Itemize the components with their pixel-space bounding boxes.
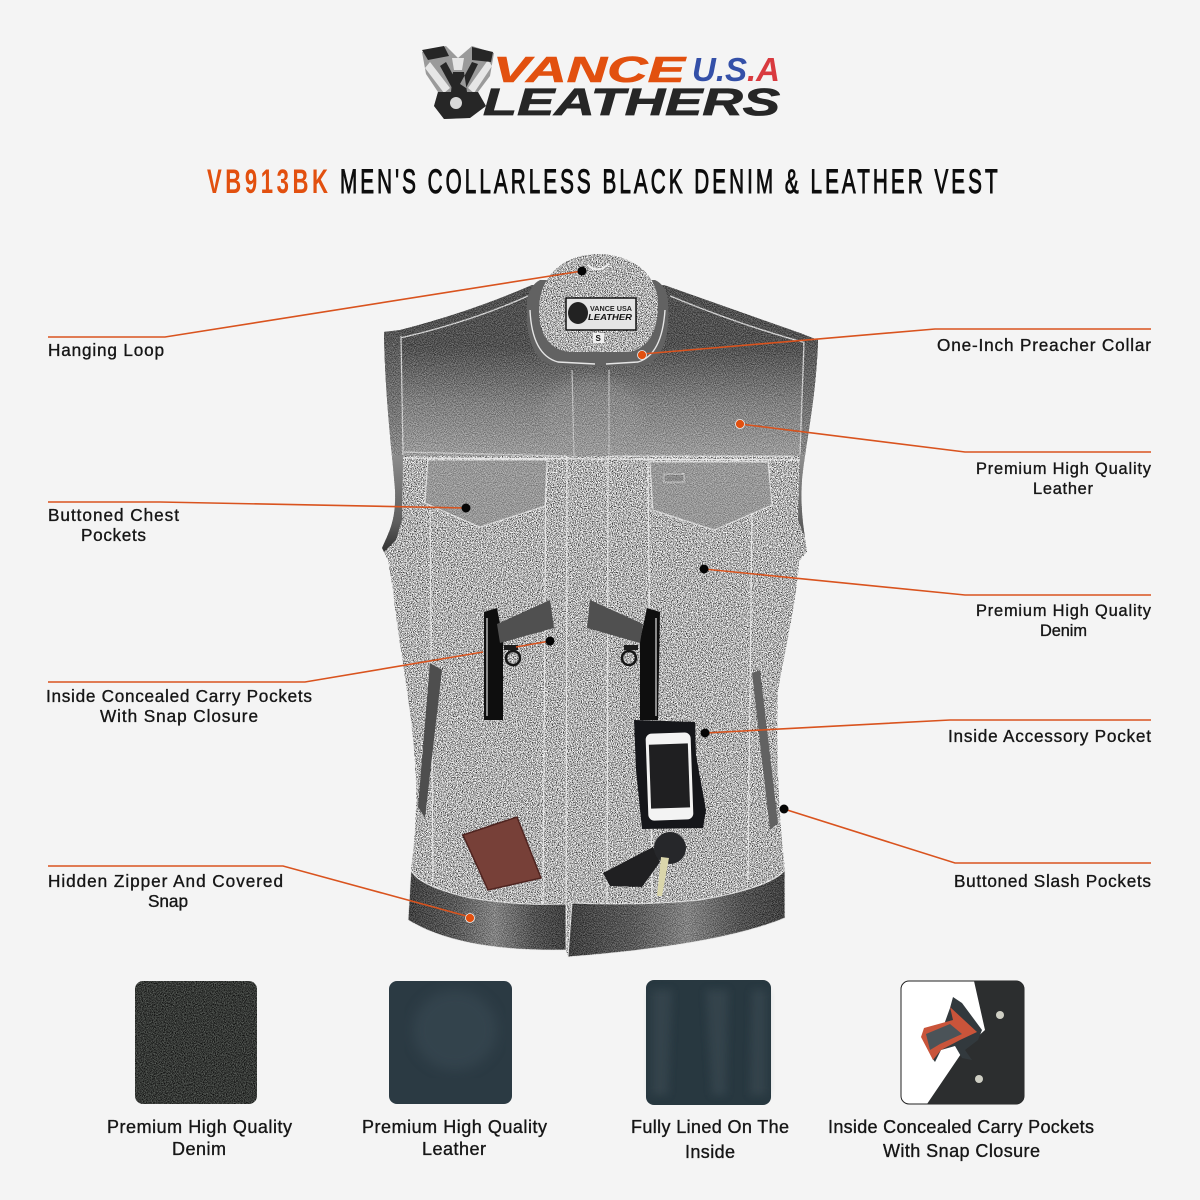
label: Buttoned Chest bbox=[48, 505, 179, 525]
label: Hidden Zipper And Covered bbox=[48, 871, 283, 891]
label second line: Leather bbox=[1033, 480, 1094, 498]
caption second line: Denim bbox=[172, 1139, 226, 1159]
logo word: U.S.A: U.S.A bbox=[692, 51, 780, 88]
icon: engine bbox=[422, 46, 494, 119]
callout: buttoned chest pockets bbox=[48, 502, 470, 545]
swatch: denim bbox=[107, 981, 292, 1159]
logo word: Leathers: LEATHERS bbox=[483, 82, 780, 124]
swatch: leather bbox=[362, 981, 547, 1159]
hem band left bbox=[408, 870, 566, 950]
vest denim body bbox=[382, 285, 818, 957]
callout: premium leather bbox=[736, 420, 1152, 498]
wallet bbox=[463, 817, 541, 890]
title: product code: VB913BK bbox=[207, 163, 328, 201]
size tag: S bbox=[596, 334, 602, 343]
swatch photo: denim panel bbox=[927, 981, 1024, 1104]
label: Premium High Quality bbox=[976, 460, 1152, 478]
label: Premium High Quality bbox=[976, 602, 1152, 620]
callout: premium denim bbox=[700, 564, 1152, 640]
callout: one-inch preacher collar bbox=[638, 329, 1151, 360]
right slash pocket bbox=[752, 670, 778, 830]
caption: Fully Lined On The bbox=[631, 1117, 789, 1137]
callout: hidden zipper and covered snap bbox=[48, 866, 474, 922]
left pistol bbox=[484, 600, 554, 720]
neck label: LEATHER bbox=[588, 313, 632, 322]
label: Buttoned Slash Pockets bbox=[954, 871, 1151, 891]
callout: hanging loop bbox=[48, 266, 586, 360]
callout: buttoned slash pockets bbox=[780, 804, 1151, 891]
size tag bbox=[593, 333, 604, 343]
vest leather yoke bbox=[378, 280, 824, 460]
hanging loop bbox=[588, 264, 609, 269]
label second line: Denim bbox=[1040, 622, 1087, 640]
caption: Premium High Quality bbox=[362, 1117, 547, 1137]
caption: Inside Concealed Carry Pockets bbox=[828, 1117, 1094, 1137]
vest collar and inner label bbox=[527, 254, 668, 366]
label: One-Inch Preacher Collar bbox=[937, 335, 1151, 355]
phone bbox=[645, 732, 693, 821]
vest illustration bbox=[378, 254, 824, 957]
vest armhole binding bbox=[380, 330, 822, 558]
neck label: VANCE USA bbox=[590, 306, 632, 313]
caption second line: Leather bbox=[422, 1139, 486, 1159]
left chest pocket flap bbox=[425, 460, 547, 527]
leather grain overlay bbox=[378, 280, 824, 957]
hem band right bbox=[568, 870, 785, 957]
callout: inside concealed carry pockets bbox=[46, 636, 554, 726]
label: Hanging Loop bbox=[48, 340, 164, 360]
right chest pocket flap bbox=[650, 462, 772, 530]
swatch photo: holstered pistol bbox=[921, 997, 982, 1062]
neck label bbox=[566, 298, 636, 330]
label second line: Snap bbox=[148, 891, 188, 911]
logo: Vance Leathers USA bbox=[422, 46, 780, 124]
logo word: Vance: VANCE bbox=[493, 49, 687, 90]
title: product name: MEN'S COLLARLESS BLACK DENIM & LEATHER VEST bbox=[340, 163, 998, 201]
swatch: concealed carry pocket bbox=[828, 981, 1094, 1161]
label: Inside Accessory Pocket bbox=[948, 726, 1151, 746]
caption second line: With Snap Closure bbox=[883, 1141, 1040, 1161]
label second line: With Snap Closure bbox=[100, 706, 258, 726]
label second line: Pockets bbox=[81, 525, 146, 545]
swatch: lining bbox=[631, 980, 789, 1162]
caption: Premium High Quality bbox=[107, 1117, 292, 1137]
right pistol bbox=[587, 600, 660, 720]
car key and fob bbox=[603, 832, 686, 896]
phone pouch with phone bbox=[634, 720, 706, 829]
caption second line: Inside bbox=[685, 1142, 735, 1162]
label: Inside Concealed Carry Pockets bbox=[46, 686, 312, 706]
left slash pocket bbox=[418, 663, 442, 818]
callout: inside accessory pocket bbox=[700, 720, 1151, 746]
title bbox=[207, 163, 998, 201]
